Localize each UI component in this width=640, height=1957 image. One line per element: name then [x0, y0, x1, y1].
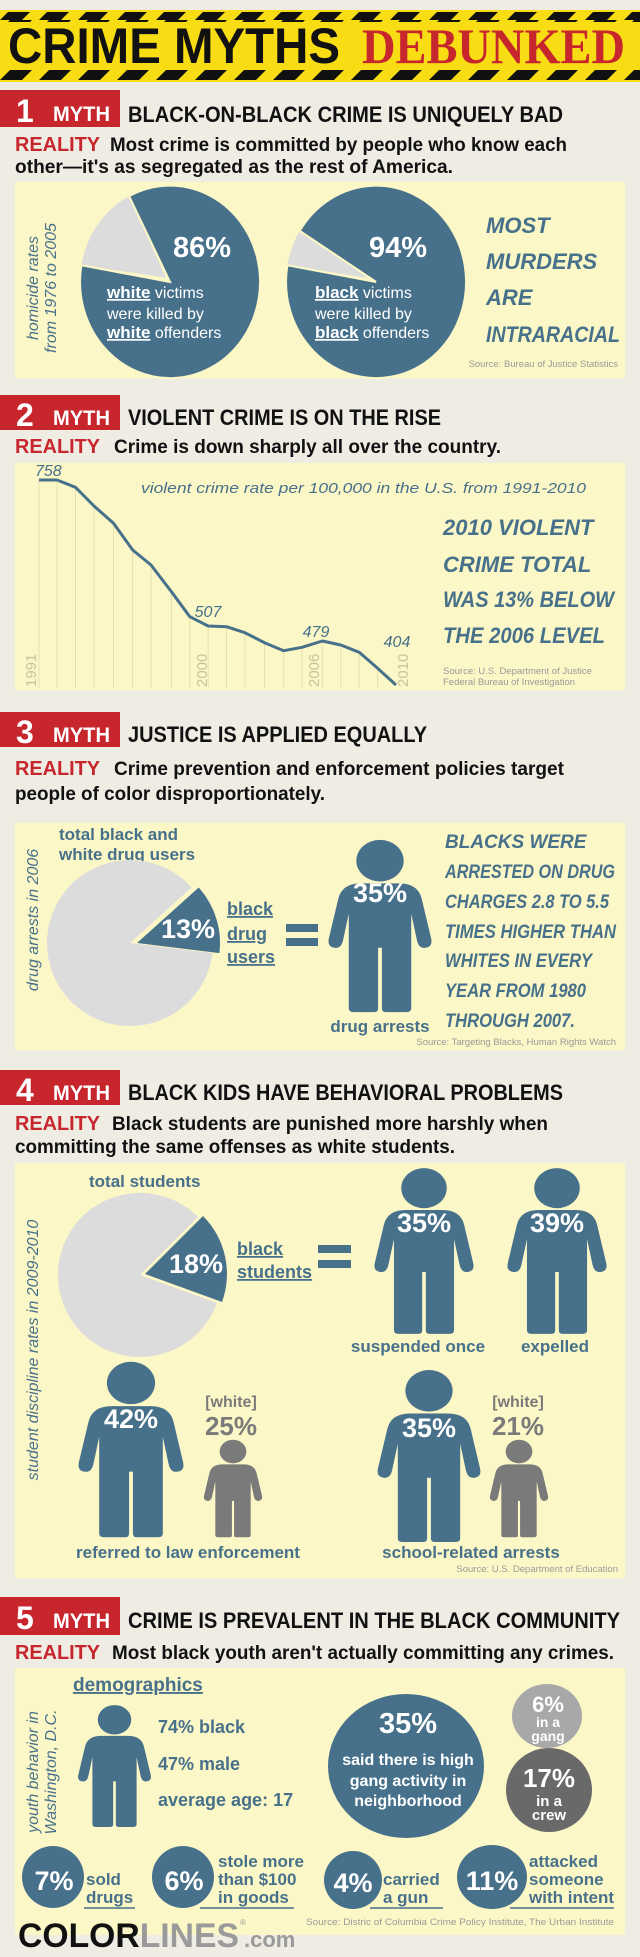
section 1 heading: [0, 90, 563, 129]
callout: 13% below: 2010 VIOLENT: [442, 515, 595, 540]
person: drug arrests: [329, 840, 431, 1036]
logo: colorlines: COLORLINES: [18, 1917, 239, 1955]
section 1 heading: 1: [16, 93, 34, 129]
stat: attacked: [457, 1845, 614, 1909]
stat: stole: than $100: [218, 1870, 296, 1889]
person: expelled: [507, 1168, 607, 1356]
section 4 heading: BLACK KIDS HAVE BEHAVIORAL PROBLEMS: [128, 1080, 563, 1105]
callout: most murders intraracial: MURDERS: [486, 249, 598, 274]
reality 1: [15, 134, 567, 178]
callout: 13% below: THE 2006 LEVEL: [443, 623, 605, 648]
pie white victims: 86%: [173, 232, 231, 264]
callout: [444, 832, 617, 1032]
section 3 heading: JUSTICE IS APPLIED EQUALLY: [128, 722, 427, 747]
person: suspended once: [351, 1168, 485, 1356]
circle 35% gang activity: neighborhood: [354, 1793, 462, 1810]
person: drug arrests: drug arrests: [330, 1017, 430, 1036]
circle 35% gang activity: gang activity in: [350, 1773, 466, 1790]
stat: sold drugs: [22, 1846, 135, 1908]
reality 3: REALITY: [15, 758, 101, 780]
reality 4: committing the same offenses as white students.: [15, 1137, 455, 1158]
person: expelled: 39%: [530, 1208, 584, 1238]
panel 5: youth behavior: demographics: [73, 1675, 203, 1696]
section 2 heading: MYTH: [53, 407, 110, 430]
data labels: [35, 463, 410, 651]
year labels: 2006: [306, 654, 323, 687]
person: arrests 35%: [378, 1370, 480, 1542]
reality 2: REALITY: [15, 436, 101, 458]
source: [443, 666, 592, 688]
stat: sold drugs: drugs: [86, 1888, 133, 1907]
pie students: [58, 1193, 227, 1357]
year labels: 2010: [395, 654, 412, 687]
stat: attacked: 11%: [466, 1866, 518, 1896]
circle 6% gang: 6%: [532, 1692, 564, 1717]
pie white victims: were killed by: [106, 306, 204, 323]
reality 3: people of color disproportionately.: [15, 784, 325, 805]
white 25% figure: [204, 1394, 262, 1537]
rotated label: homicide rates: [25, 236, 42, 340]
section 2 heading: [0, 395, 441, 433]
pie black victims: black victims: [315, 283, 412, 302]
stat: stole: 6%: [164, 1866, 204, 1896]
source: Source: U.S. Department of Justice: [443, 666, 592, 677]
stat: stole: in goods: [218, 1888, 289, 1907]
panel 5: youth behavior: 47% male: [158, 1754, 240, 1774]
panel 3: drug arrests: black: [227, 899, 274, 919]
callout: most murders intraracial: MOST: [486, 213, 551, 238]
section 3 heading: MYTH: [53, 724, 110, 747]
source: Source: Bureau of Justice Statistics: [469, 359, 618, 370]
section 2 heading: 2: [16, 397, 34, 433]
circle 17% crew: 17%: [523, 1763, 575, 1793]
section 1 heading: MYTH: [53, 103, 110, 126]
panel 4: student discipline: school-related arrests: [382, 1543, 560, 1562]
stat: sold drugs: sold: [86, 1870, 121, 1889]
panel 1: homicide pies: from 1976 to 2005: [43, 223, 60, 353]
year labels: [23, 654, 412, 687]
person: referred 42%: 42%: [104, 1404, 158, 1434]
panel 3: drug arrests: white drug users: [58, 845, 195, 864]
white 25% figure: 25%: [205, 1411, 257, 1441]
white 21% figure: [490, 1394, 548, 1537]
callout: ARRESTED ON DRUG: [444, 862, 615, 883]
circle 6% gang: in a: [536, 1714, 560, 1730]
section 4 heading: [0, 1070, 563, 1108]
callout: 13% below: CRIME TOTAL: [443, 552, 591, 577]
logo: colorlines: .com: [244, 1927, 295, 1952]
data labels: 507: [195, 604, 222, 621]
equals sign: [318, 1245, 351, 1268]
callout: most murders intraracial: [485, 213, 620, 347]
year labels: 2000: [194, 654, 211, 687]
stat: stole: stole more: [218, 1852, 304, 1871]
callout: TIMES HIGHER THAN: [445, 922, 617, 943]
circle 35% gang activity: 35%: [379, 1708, 437, 1740]
panel 5: youth behavior: Washington, D.C.: [43, 1709, 60, 1835]
circle 35% gang activity: said there is high: [342, 1752, 474, 1769]
chart title: violent crime rate per 100,000 in the U.S. from 1991-2010: [141, 480, 587, 497]
panel 3: drug arrests: Source: Targeting Blacks, Human Rights Watch: [416, 1037, 616, 1048]
section 5 heading: MYTH: [53, 1610, 110, 1633]
person: drug arrests: 35%: [353, 878, 407, 908]
panel 3: drug arrests: users: [227, 947, 275, 967]
pie white victims: white offenders: [106, 323, 221, 342]
data labels: 758: [35, 463, 62, 480]
white 21% figure: 21%: [492, 1411, 544, 1441]
panel 4: student discipline: referred to law enforcement: [76, 1543, 300, 1562]
stat: attacked: with intent: [528, 1888, 614, 1907]
panel 3: drug arrests: drug: [227, 924, 267, 944]
stat: stole: [152, 1846, 304, 1908]
person: referred 42%: [79, 1362, 183, 1537]
person: demographics: [78, 1705, 151, 1827]
circle 17% crew: [506, 1748, 592, 1832]
callout: WHITES IN EVERY: [445, 951, 594, 972]
reality 4: Black students are punished more harshly when: [112, 1114, 548, 1135]
stat: attacked: attacked: [529, 1852, 598, 1871]
panel 5: youth behavior: youth behavior in: [25, 1711, 42, 1834]
reality 5: REALITY: [15, 1642, 101, 1664]
person: expelled: expelled: [521, 1337, 589, 1356]
panel 4: student discipline: total students: [89, 1172, 200, 1191]
pie black victims: [286, 186, 466, 378]
stat: carried gun: [324, 1851, 443, 1909]
reality 3: Crime prevention and enforcement policies target: [114, 759, 565, 780]
stat: attacked: someone: [529, 1870, 604, 1889]
logo: colorlines: ®: [240, 1918, 246, 1927]
circle 17% crew: in a: [536, 1793, 563, 1810]
white 25% figure: [white]: [205, 1394, 257, 1411]
pie drug users: [47, 860, 220, 1026]
pie white victims: white victims: [106, 283, 204, 302]
pie black victims: black offenders: [315, 323, 429, 342]
reality 4: REALITY: [15, 1113, 101, 1135]
section 5 heading: 5: [16, 1600, 34, 1636]
header banner: DEBUNKED: [362, 18, 625, 74]
panel 3: drug arrests: drug arrests in 2006: [25, 849, 42, 991]
data labels: 479: [303, 624, 329, 641]
panel 4: student discipline: black: [237, 1239, 284, 1259]
panel 4: student discipline: students: [237, 1262, 312, 1282]
reality 4: [15, 1113, 548, 1158]
pie drug users: 13%: [161, 914, 215, 944]
stat: carried gun: carried: [383, 1870, 440, 1889]
section 3 heading: [0, 712, 427, 750]
panel 3: drug arrests: total black and: [59, 825, 178, 844]
source: Federal Bureau of Investigation: [443, 677, 575, 688]
equals sign: [286, 924, 318, 946]
callout: THROUGH 2007.: [445, 1011, 575, 1032]
callout: YEAR FROM 1980: [445, 981, 586, 1002]
pie black victims: were killed by: [314, 306, 412, 323]
circle 17% crew: crew: [532, 1807, 566, 1824]
callout: 13% below: [442, 515, 616, 648]
stat: carried gun: a gun: [383, 1888, 428, 1907]
panel 5: youth behavior: average age: 17: [158, 1790, 293, 1810]
reality 1: Most crime is committed by people who know each: [110, 135, 567, 156]
reality 1: REALITY: [15, 134, 101, 156]
callout: BLACKS WERE: [445, 832, 588, 853]
panel 3: drug arrests: [15, 823, 625, 1050]
panel 5: youth behavior: 74% black: [158, 1717, 246, 1737]
crime rate line: [39, 480, 396, 685]
stat: sold drugs: 7%: [34, 1866, 74, 1896]
panel 4: student discipline: [15, 1163, 625, 1578]
stat: carried gun: 4%: [333, 1868, 373, 1898]
callout: most murders intraracial: INTRARACIAL: [486, 322, 620, 347]
title: CRIME MYTHS: [8, 18, 340, 74]
panel 1: homicide pies: [15, 182, 625, 378]
section 5 heading: [0, 1597, 620, 1636]
section 1 heading: BLACK-ON-BLACK CRIME IS UNIQUELY BAD: [128, 102, 563, 127]
panel 4: student discipline: student discipline rates in 2009-2010: [25, 1220, 42, 1480]
section 3 heading: 3: [16, 714, 34, 750]
section 4 heading: 4: [16, 1072, 34, 1108]
person: suspended once: 35%: [397, 1208, 451, 1238]
callout: 13% below: WAS 13% BELOW: [443, 587, 616, 612]
circle 6% gang: gang: [531, 1728, 565, 1744]
section 2 heading: VIOLENT CRIME IS ON THE RISE: [128, 405, 441, 430]
person: arrests 35%: 35%: [402, 1413, 456, 1443]
pie white victims: [80, 186, 260, 378]
year labels: 1991: [23, 654, 40, 687]
reality 2: Crime is down sharply all over the country.: [114, 437, 501, 458]
white 21% figure: [white]: [492, 1394, 544, 1411]
person: suspended once: suspended once: [351, 1337, 485, 1356]
reality 5: Most black youth aren't actually committing any crimes.: [112, 1643, 614, 1664]
pie black victims: 94%: [369, 232, 427, 264]
panel 5: youth behavior: [15, 1668, 625, 1935]
callout: CHARGES 2.8 TO 5.5: [445, 892, 609, 913]
data labels: 404: [384, 634, 410, 651]
reality 3: [15, 758, 565, 805]
reality 1: other—it's as segregated as the rest of America.: [15, 157, 453, 178]
panel 5: youth behavior: Source: Distric of Columbia Crime Policy Institute, The Urban Institute: [306, 1917, 614, 1928]
circle 6% gang: [512, 1684, 582, 1748]
section 4 heading: MYTH: [53, 1082, 110, 1105]
panel 2: line chart: [15, 463, 625, 690]
callout: most murders intraracial: ARE: [485, 285, 534, 310]
panel 4: student discipline: Source: U.S. Department of Education: [456, 1564, 618, 1575]
pie students: 18%: [169, 1249, 223, 1279]
header banner: [0, 10, 640, 82]
circle 35% gang activity: [328, 1694, 484, 1838]
